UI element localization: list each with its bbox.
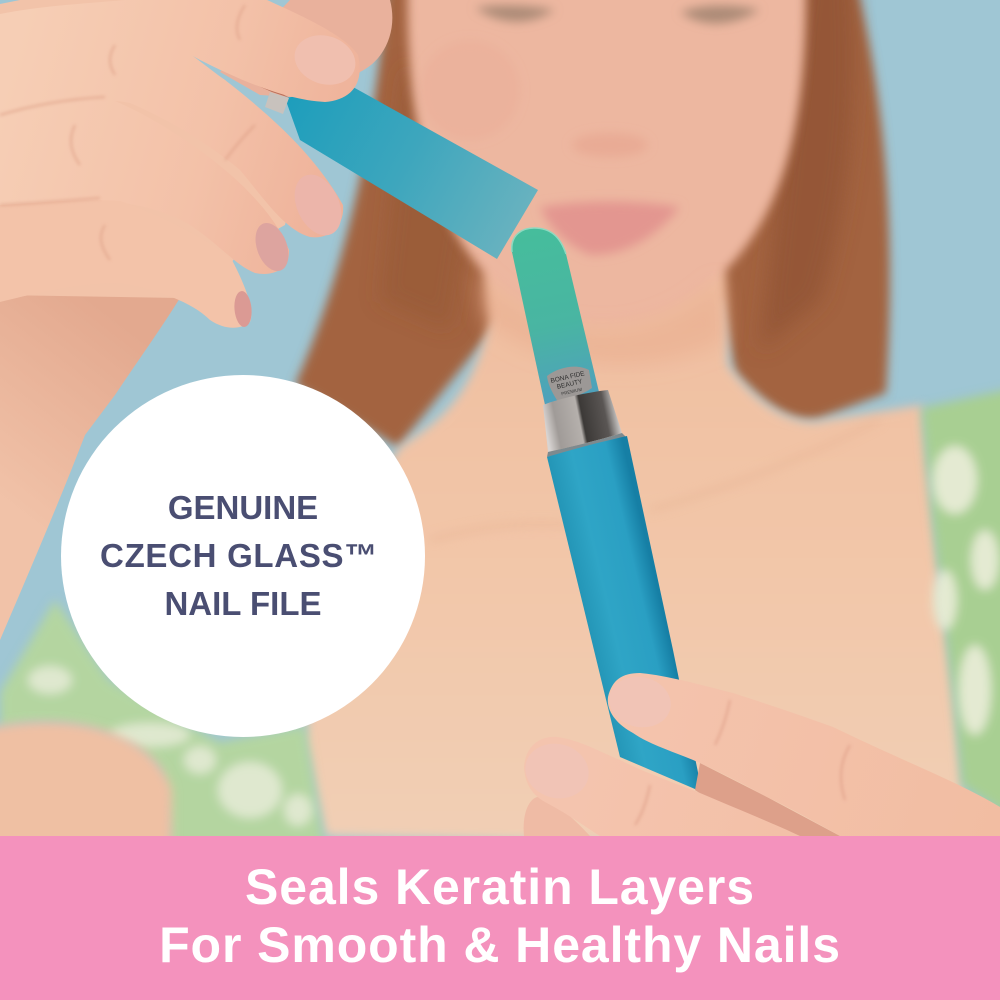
handle	[547, 436, 702, 792]
icon: glass nail file: BONA FIDE	[550, 370, 586, 385]
skin: face, neck and chest	[305, 0, 965, 850]
finger 1	[0, 0, 360, 102]
knuckle creases and finger separations	[0, 5, 255, 260]
finger 2	[0, 22, 343, 237]
thumb behind the cap	[220, 0, 392, 100]
icon: glass nail file: PREMIUM	[561, 387, 583, 396]
hand base filling gaps between fingers	[0, 0, 300, 302]
banner: headline	[0, 836, 1000, 1000]
callout: product badge	[61, 375, 425, 737]
collarbone shadows	[430, 420, 880, 540]
banner: headline: For Smooth & Healthy Nails	[159, 917, 841, 973]
facial features: eyes, nose, cheek and lips	[420, 5, 760, 255]
icon: glass nail file	[512, 228, 702, 792]
hand upper left with fingers	[0, 0, 360, 640]
lower finger	[524, 737, 800, 836]
shadow under chin	[475, 270, 725, 365]
fingernails upper hand	[233, 28, 362, 328]
banner: headline: Seals Keratin Layers	[245, 859, 755, 915]
shoulder left	[0, 722, 172, 850]
knuckle	[635, 700, 850, 825]
callout: product badge: CZECH GLASS™	[100, 537, 378, 574]
icon: file cap held in fingers	[265, 87, 538, 259]
hand lower right with fingers	[519, 671, 1000, 836]
hair	[295, 0, 890, 447]
third finger	[524, 797, 590, 836]
callout: product badge: GENUINE	[168, 489, 318, 526]
hair shading	[380, 0, 854, 350]
palm	[0, 295, 180, 640]
dress right	[922, 385, 1000, 830]
metal collar	[543, 390, 622, 452]
dress left	[0, 600, 325, 850]
icon: glass nail file: BEAUTY	[556, 378, 584, 391]
finger 4	[0, 200, 251, 328]
upper finger	[608, 673, 1000, 836]
nails	[604, 671, 676, 733]
logo plate	[547, 367, 592, 402]
callout: product badge: NAIL FILE	[164, 585, 322, 622]
back finger shadow	[695, 763, 840, 836]
finger 3	[0, 96, 289, 274]
